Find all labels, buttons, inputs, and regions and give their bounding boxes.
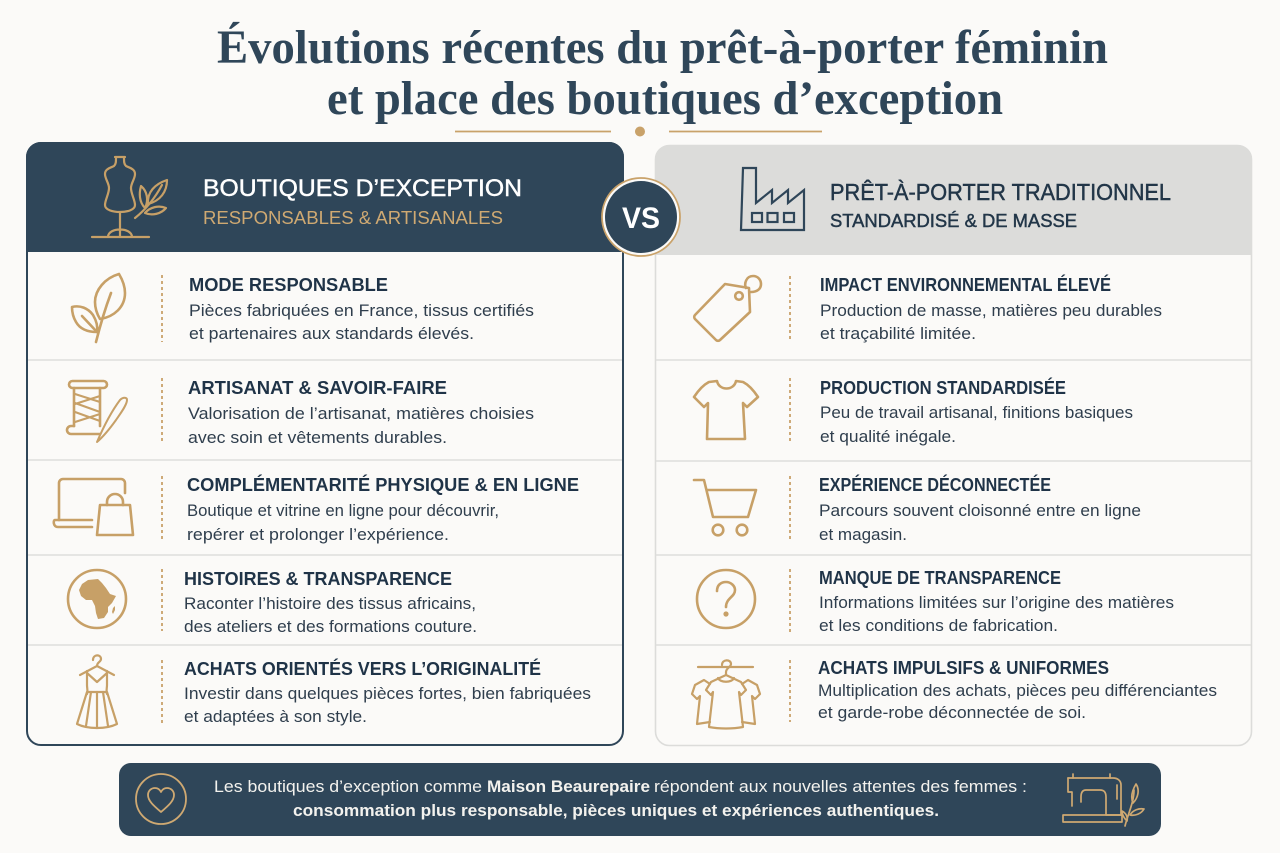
title: [217, 21, 1108, 125]
row: mode responsable: Pièces fabriquées en France, tissus certifiés: [189, 302, 534, 320]
row: complémentarité: Boutique et vitrine en ligne pour découvrir,: [187, 502, 499, 520]
row: manque de transparence: et les conditions de fabrication.: [819, 617, 1058, 635]
header subtitle: prêt-à-porter: STANDARDISÉ & DE MASSE: [830, 211, 1077, 231]
row: artisanat: avec soin et vêtements durables.: [188, 429, 447, 447]
icon: price tag: [694, 276, 761, 341]
row: impact environnemental: Production de masse, matières peu durables: [820, 302, 1162, 320]
icon: laptop and bag: [54, 479, 133, 535]
icon: clothes on rail: [692, 660, 760, 728]
banner text: Les boutiques d’exception comme: [214, 778, 482, 796]
row: production standardisée: [694, 377, 1133, 446]
icon: mannequin with leaves: [92, 157, 167, 237]
row: artisanat: Valorisation de l’artisanat, matières choisies: [188, 405, 534, 423]
header title: boutiques: BOUTIQUES D’EXCEPTION: [203, 175, 522, 202]
row: achats originalité: [77, 655, 591, 728]
row: production standardisée: PRODUCTION STANDARDISÉE: [820, 377, 1066, 398]
header subtitle: boutiques: RESPONSABLES & ARTISANALES: [203, 208, 503, 228]
row: mode responsable: [72, 274, 534, 343]
row: impact environnemental: et traçabilité limitée.: [820, 325, 976, 343]
row: manque de transparence: MANQUE DE TRANSPARENCE: [819, 568, 1061, 588]
row: expérience déconnectée: Parcours souvent cloisonné entre en ligne: [819, 502, 1141, 520]
panel header: prêt-à-porter: [655, 145, 1252, 255]
panel: boutiques d'exception: [26, 142, 624, 745]
icon: sewing machine: [1063, 774, 1144, 826]
title: et place des boutiques d’exception: [327, 72, 1003, 125]
row: complémentarité: repérer et prolonger l’expérience.: [187, 526, 449, 544]
row: impact environnemental: [694, 274, 1162, 343]
row: manque de transparence: Informations limitées sur l’origine des matières: [819, 594, 1174, 612]
banner text: [214, 778, 1027, 820]
row: histoires: HISTOIRES & TRANSPARENCE: [184, 569, 452, 589]
title: Évolutions récentes du prêt-à-porter féminin: [217, 21, 1108, 74]
VS badge: [602, 178, 680, 256]
row: achats impulsifs: ACHATS IMPULSIFS & UNIFORMES: [818, 658, 1109, 678]
row: complémentarité: COMPLÉMENTARITÉ PHYSIQUE & EN LIGNE: [187, 474, 579, 495]
row: mode responsable: MODE RESPONSABLE: [189, 275, 388, 295]
icon: thread spool and needle: [67, 381, 127, 442]
row: achats originalité: et adaptées à son style.: [184, 708, 367, 726]
row: manque de transparence: [697, 568, 1174, 635]
row: achats impulsifs: et garde-robe déconnectée de soi.: [818, 704, 1086, 722]
row: artisanat: ARTISANAT & SAVOIR-FAIRE: [188, 378, 447, 398]
row: artisanat: [67, 378, 534, 447]
row: expérience déconnectée: [694, 474, 1141, 544]
title ornament: [455, 126, 822, 136]
icon: shopping cart: [694, 480, 756, 535]
icon: question mark: [697, 570, 755, 628]
row: achats originalité: Investir dans quelques pièces fortes, bien fabriquées: [184, 685, 591, 703]
row: achats originalité: ACHATS ORIENTÉS VERS L’ORIGINALITÉ: [184, 658, 541, 679]
banner text: Maison Beaurepaire: [487, 778, 650, 796]
row: achats impulsifs: Multiplication des achats, pièces peu différenciantes: [818, 682, 1217, 700]
row: histoires: [68, 569, 477, 636]
row: production standardisée: Peu de travail artisanal, finitions basiques: [820, 404, 1133, 422]
icon: t-shirt: [694, 381, 758, 439]
row: impact environnemental: IMPACT ENVIRONNEMENTAL ÉLEVÉ: [820, 274, 1111, 295]
row: mode responsable: et partenaires aux standards élevés.: [189, 325, 474, 343]
row: histoires: Raconter l’histoire des tissus africains,: [184, 595, 476, 613]
row: complémentarité: [54, 474, 579, 544]
header title: prêt-à-porter: PRÊT-À-PORTER TRADITIONNEL: [830, 179, 1171, 205]
callout: conclusion banner: [119, 763, 1161, 836]
icon: dress on hanger: [77, 655, 117, 728]
icon: factory: [741, 168, 804, 230]
icon: globe with Africa: [68, 570, 126, 628]
row: expérience déconnectée: et magasin.: [819, 526, 907, 544]
row: achats impulsifs: [692, 658, 1217, 728]
VS badge: VS: [622, 202, 660, 235]
banner text: consommation plus responsable, pièces uniques et expériences authentiques.: [293, 802, 939, 820]
panel header: boutiques: [26, 142, 624, 252]
banner text: répondent aux nouvelles attentes des femmes :: [654, 778, 1027, 796]
row: expérience déconnectée: EXPÉRIENCE DÉCONNECTÉE: [819, 474, 1051, 495]
row: production standardisée: et qualité inégale.: [820, 428, 956, 446]
row: histoires: des ateliers et des formations couture.: [184, 618, 477, 636]
icon: leaves: [72, 274, 125, 342]
panel: prêt-à-porter traditionnel: [655, 145, 1252, 746]
icon: heart: [136, 774, 186, 824]
